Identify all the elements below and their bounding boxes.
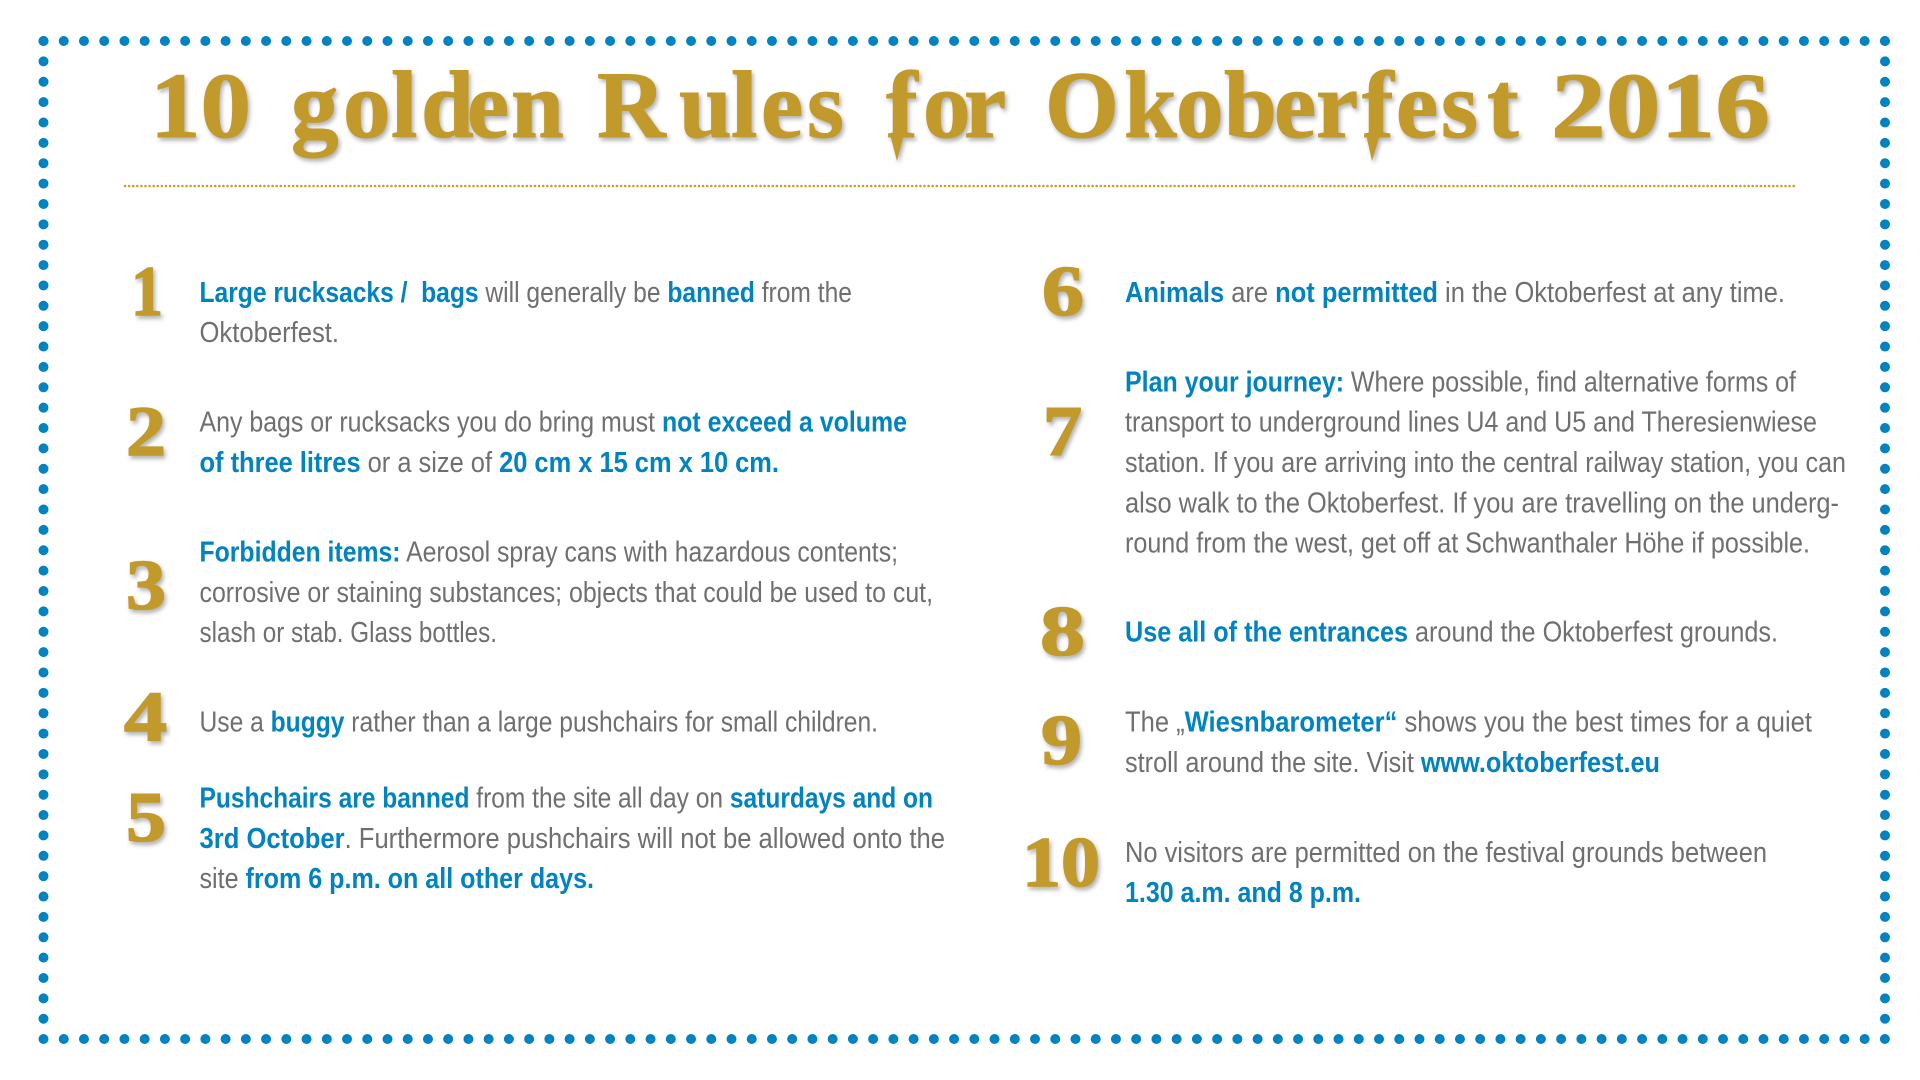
rule 5: site from 6 p.m. on all other days. (200, 863, 594, 895)
rule 9 (1041, 702, 1812, 780)
title: 2016 (1551, 55, 1770, 158)
rule 6 (1042, 253, 1785, 331)
rule 2: of three litres or a size of 20 cm x 15 cm x 10 cm. (200, 447, 779, 479)
rule 7: also walk to the Oktoberfest. If you are travelling on the underg- (1125, 488, 1839, 520)
rule 3 (126, 536, 933, 649)
rule 7: transport to underground lines U4 and U5 and Theresienwiese (1125, 406, 1817, 438)
rule 8: Use all of the entrances around the Oktoberfest grounds. (1125, 616, 1778, 648)
rule 7: 7 (1043, 393, 1082, 471)
rule 2: Any bags or rucksacks you do bring must not exceed a volume (200, 406, 907, 438)
title divider (125, 185, 1796, 187)
rule 8 (1040, 593, 1778, 671)
rule 5: 3rd October. Furthermore pushchairs will not be allowed onto the (200, 823, 945, 855)
rule 1: Oktoberfest. (200, 317, 339, 349)
rule 7: Plan your journey: Where possible, find alternative forms of (1125, 366, 1796, 398)
title: 10 (150, 55, 251, 158)
rule 1: 1 (131, 253, 163, 331)
title (150, 52, 1770, 161)
rule 3: Forbidden items: Aerosol spray cans with hazardous contents; (200, 536, 898, 568)
rule 3: corrosive or staining substances; objects that could be used to cut, (200, 577, 933, 609)
rule 4: 4 (124, 678, 167, 756)
rule 1 (131, 253, 852, 349)
title: Okoberfest (1045, 52, 1519, 158)
rule 2 (126, 393, 907, 479)
rule 3: slash or stab. Glass bottles. (200, 617, 497, 649)
title: for (886, 52, 1006, 158)
rule 9: The „Wiesnbarometer“ shows you the best times for a quiet (1125, 706, 1812, 738)
rule 4 (124, 678, 878, 756)
rule 7 (1043, 366, 1846, 560)
rule 7: round from the west, get off at Schwanthaler Höhe if possible. (1125, 528, 1810, 560)
rule 9: 9 (1041, 702, 1082, 780)
rule 8: 8 (1040, 593, 1085, 671)
rule 10: 1.30 a.m. and 8 p.m. (1125, 877, 1361, 909)
title: Rules (597, 52, 844, 158)
rule 5: Pushchairs are banned from the site all day on saturdays and on (200, 782, 933, 814)
rule 3: 3 (126, 547, 166, 625)
rule 2: 2 (126, 393, 166, 471)
rule 9: stroll around the site. Visit www.oktoberfest.eu (1125, 747, 1660, 779)
rule 1: Large rucksacks / bags will generally be banned from the (200, 277, 852, 309)
title: golden (291, 52, 564, 158)
rule 5 (126, 779, 945, 895)
rule 6: Animals are not permitted in the Oktoberfest at any time. (1125, 277, 1785, 309)
rule 10 (1022, 824, 1767, 909)
rule 4: Use a buggy rather than a large pushchairs for small children. (200, 706, 878, 738)
rule 5: 5 (126, 779, 166, 857)
rule 7: station. If you are arriving into the central railway station, you can (1125, 447, 1846, 479)
rule 6: 6 (1042, 253, 1084, 331)
rule 10: No visitors are permitted on the festival grounds between (1125, 837, 1767, 869)
rule 10: 10 (1022, 824, 1100, 902)
